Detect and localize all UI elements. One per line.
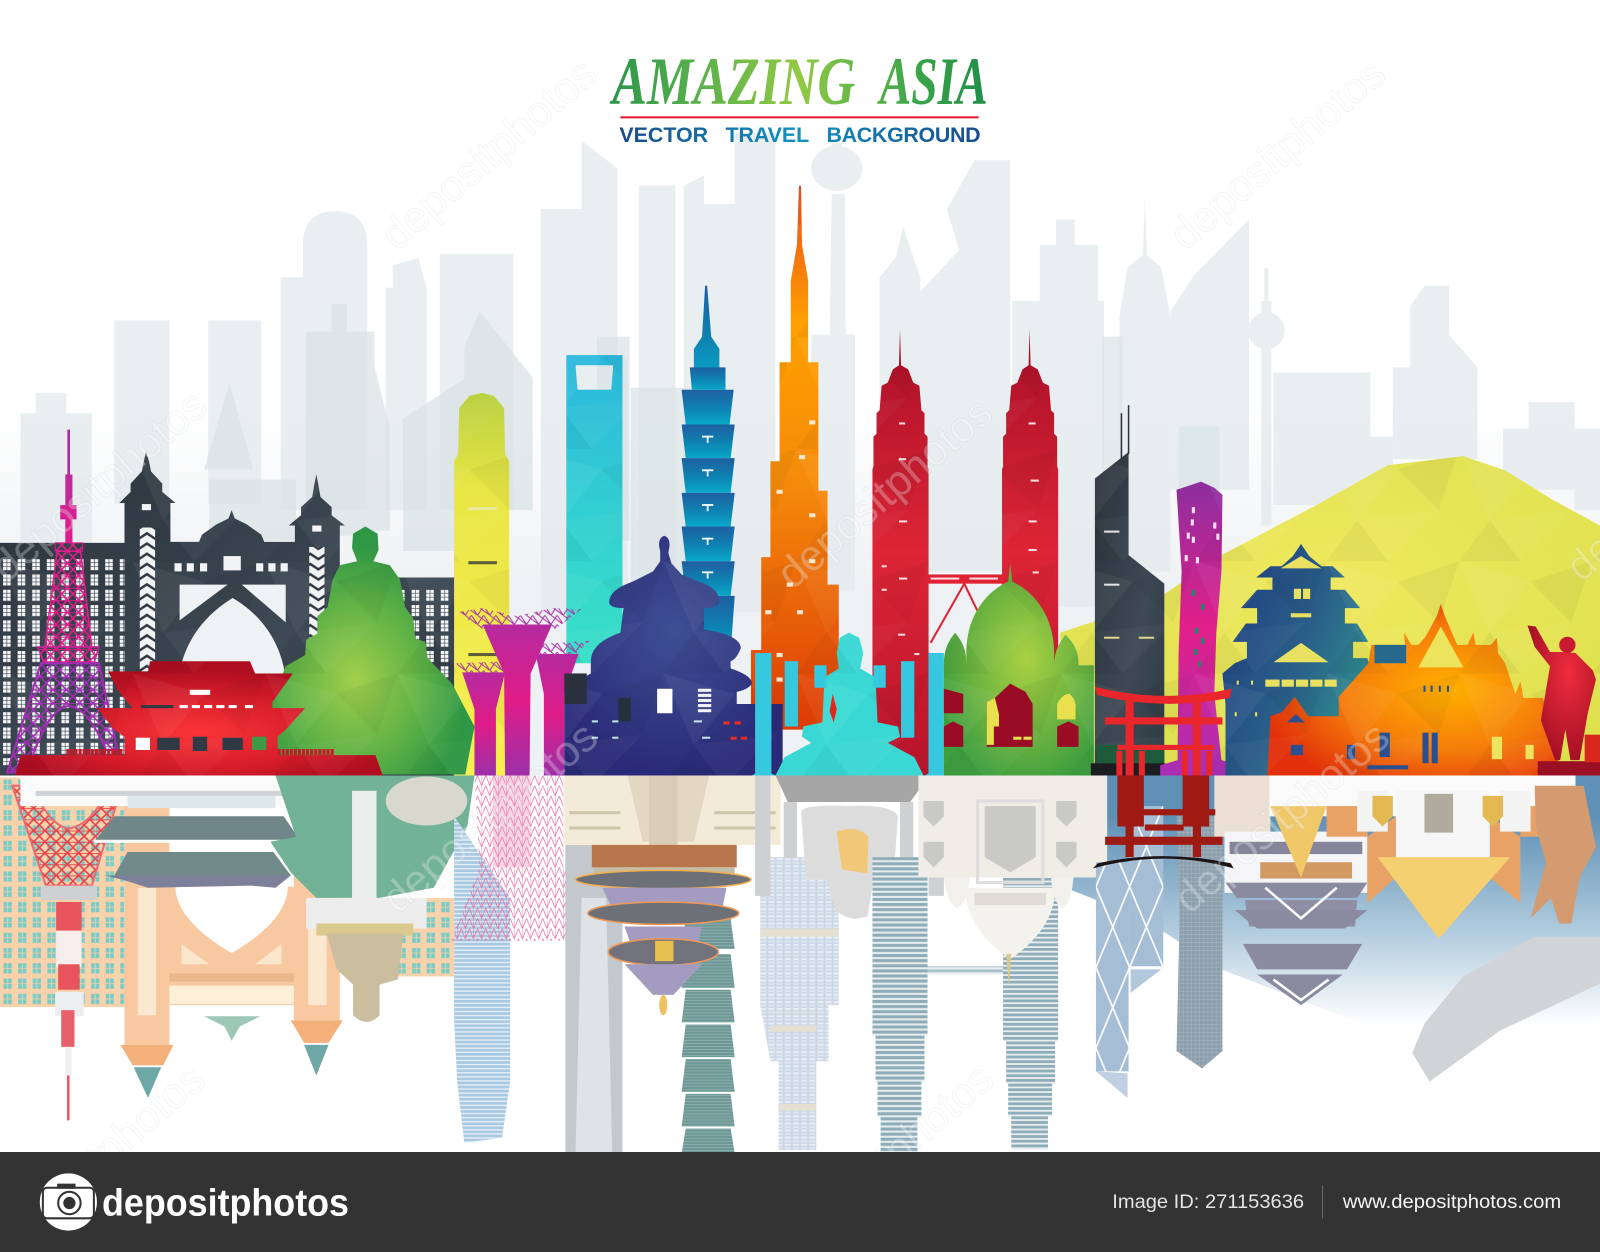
reflection: Osaka Castle (1214, 775, 1367, 1005)
reflection: Burj Khalifa (760, 857, 839, 1150)
subtitle: BACKGROUND (827, 123, 981, 147)
website url: www.depositphotos.com (1342, 1191, 1561, 1213)
reflection: Shanghai WFC (565, 845, 622, 1153)
reflection: Temple of Heaven (564, 775, 781, 1015)
torii gate with reflection (1093, 687, 1234, 868)
hotel windows, right wing (397, 590, 453, 702)
reflection: supertrees (451, 775, 597, 941)
reflection: Bank of China Tower (1096, 806, 1163, 1098)
torii upper gate (1095, 687, 1232, 775)
hotel windows, left wing (0, 556, 124, 765)
footer bar (0, 1152, 1600, 1252)
landmark: Taj Mahal (944, 563, 1094, 775)
reflection: hotel wings (0, 778, 454, 1098)
landmark: Singapore supertrees (456, 608, 590, 775)
reflection: Taj Mahal (918, 775, 1107, 987)
landmark: Temple of Heaven (564, 536, 783, 775)
reflection: Canton Tower (1177, 816, 1223, 1068)
landmark: Canton Tower (1160, 482, 1240, 775)
hotel arch openings (179, 585, 286, 679)
watermarks: depositphotos (1161, 49, 1395, 259)
torii lower reflection (1105, 775, 1222, 857)
reflection: Taipei 101 (682, 918, 735, 1153)
reflection: Petronas Towers (872, 857, 1058, 1153)
background: ghost skyline (0, 133, 1600, 775)
title underline (620, 116, 979, 118)
landmark: Osaka Castle (1222, 544, 1372, 775)
mountain (1060, 456, 1600, 775)
title: ASIA (877, 44, 988, 119)
landmark: Bank of China Tower (1091, 405, 1165, 775)
landmark: Hong Kong IFC tower (454, 393, 509, 775)
footer separator (1322, 1186, 1323, 1218)
landmark: Burj Khalifa (751, 186, 839, 730)
reflection: Hong Kong IFC (454, 816, 510, 1143)
landmark: Thai temple (1267, 604, 1561, 775)
landmark: statue with raised arm (1528, 625, 1600, 775)
reflection: Thai temple (1269, 775, 1576, 939)
subtitle (619, 123, 981, 147)
landmark: Tokyo Tower (7, 430, 117, 772)
subtitle: TRAVEL (726, 123, 809, 147)
subtitle: VECTOR (619, 123, 709, 147)
title: AMAZING (609, 44, 855, 119)
watermarks: depositphotos (768, 388, 1002, 598)
image id: Image ID: 271153636 (1112, 1191, 1304, 1213)
hotel tower chevrons (140, 528, 324, 671)
watermarks: depositphotos (372, 49, 606, 259)
reflection: Tokyo Tower (12, 786, 117, 1120)
landmark: Atlantis hotel (0, 452, 454, 775)
landmark: Korean gate (15, 661, 383, 775)
watermarks: depositphotos (373, 713, 607, 923)
reflection: rock pedestal (1412, 937, 1600, 1082)
landmark: Shanghai World Financial Center (566, 355, 622, 663)
reflection: statue (1531, 786, 1596, 923)
footer logo text: depositphotos (102, 1181, 349, 1223)
reflection: green Buddha (270, 775, 474, 1022)
footer logo icon (40, 1173, 97, 1231)
landmark: Petronas Towers (872, 329, 1058, 775)
landmark: green seated Buddha (269, 527, 474, 774)
reflection: Korean gate (20, 775, 378, 888)
landmark: teal Buddha with pillars (752, 633, 948, 775)
watermarks: depositphotos (1165, 713, 1399, 923)
reflection: teal Buddha and pillars (755, 775, 944, 919)
landmark: Taipei 101 (682, 286, 735, 653)
reflection: mountain (1060, 775, 1600, 1061)
